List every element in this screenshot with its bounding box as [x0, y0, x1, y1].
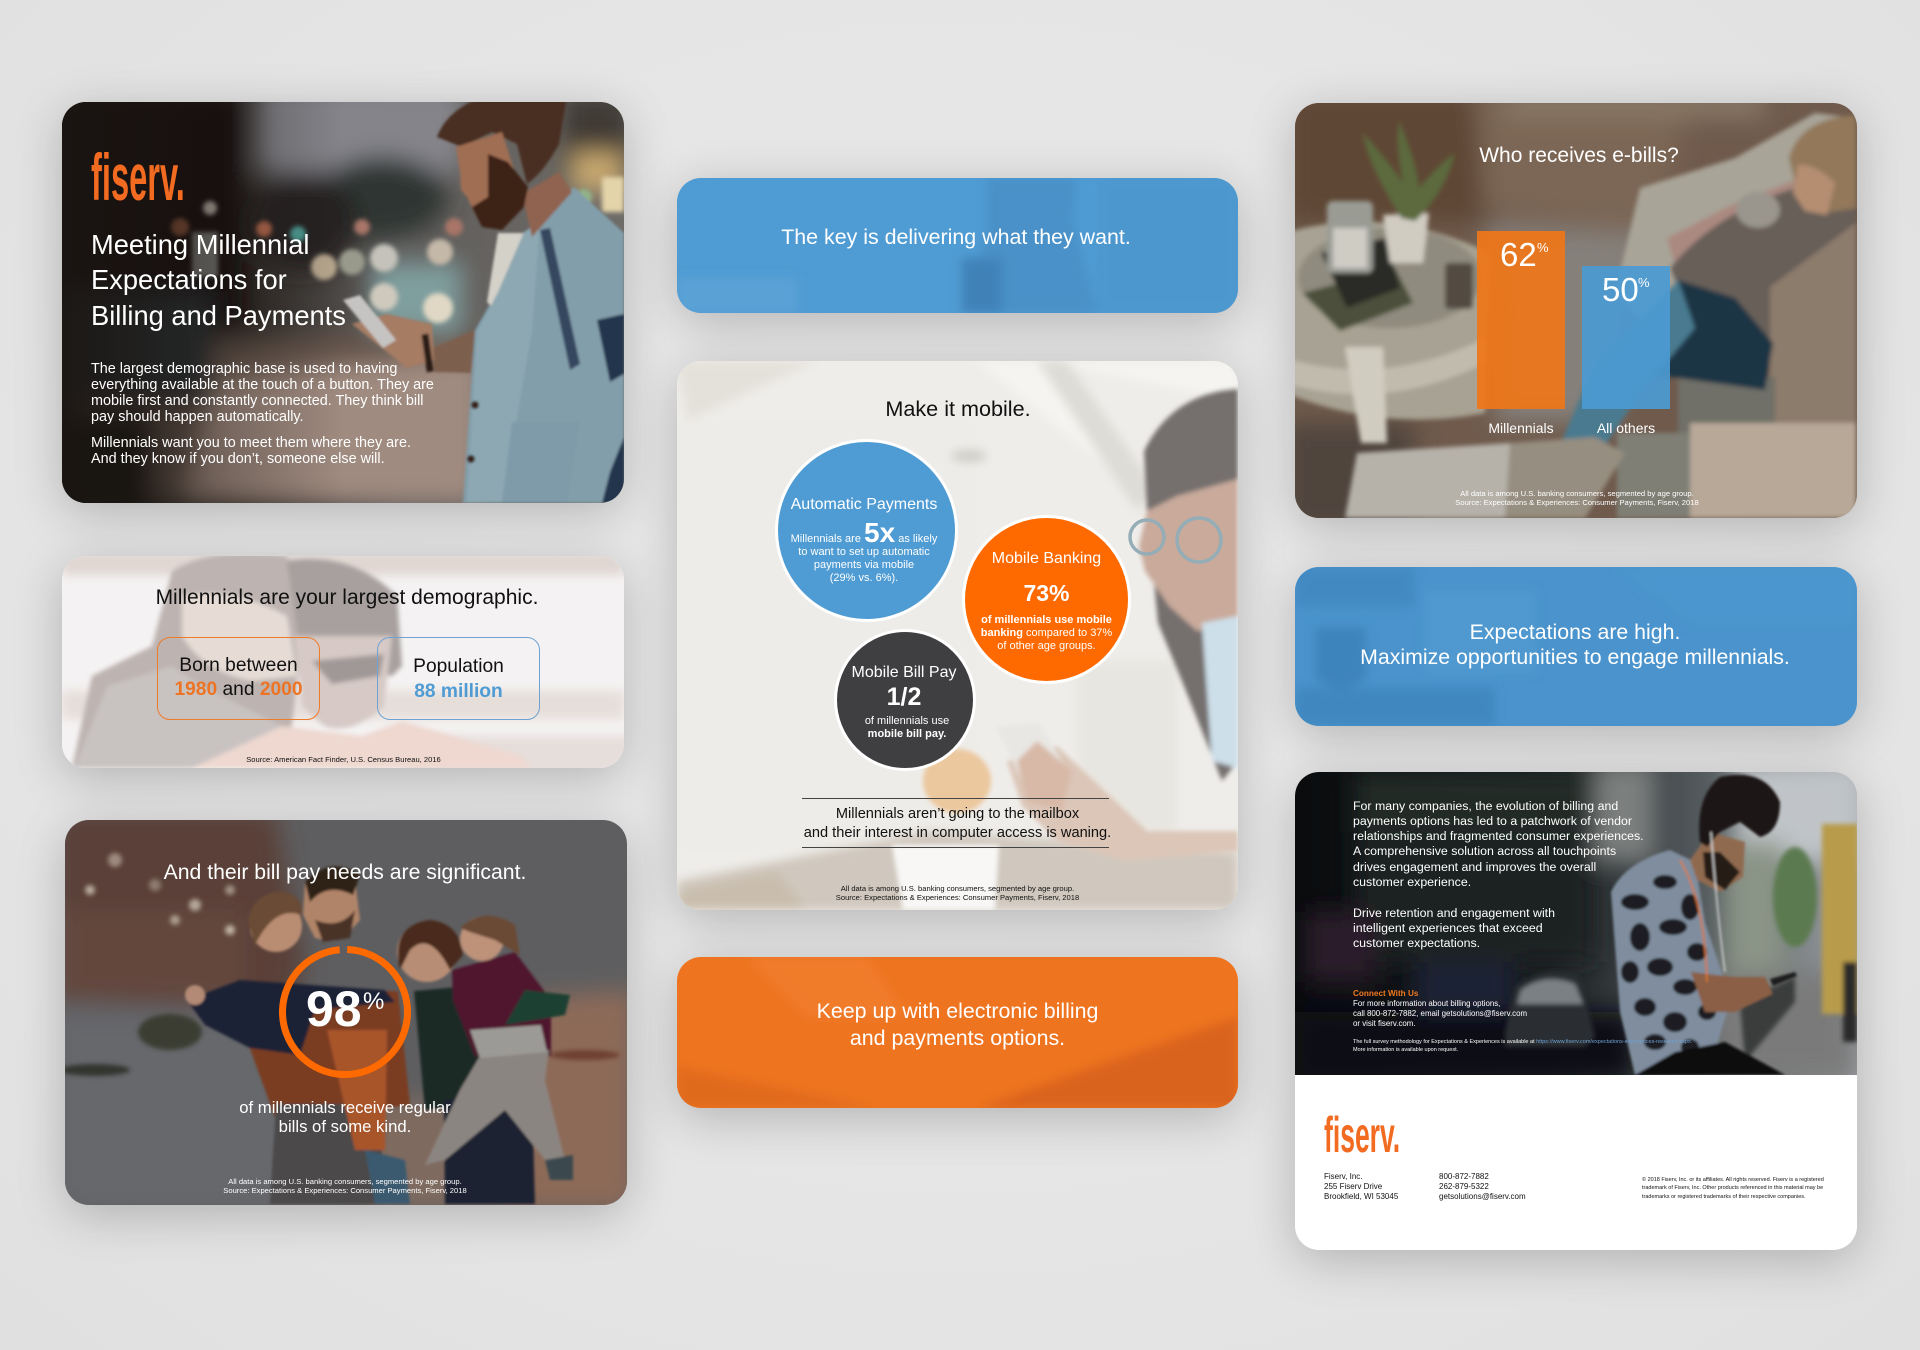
stat box: birth years: Born between: [179, 654, 298, 676]
legal text: trademark of Fiserv, Inc. Other products referenced in this material may be: [1642, 1185, 1823, 1191]
legal text: © 2018 Fiserv, Inc. or its affiliates. All rights reserved. Fiserv is a registered: [1642, 1177, 1824, 1183]
bubble heading: Mobile Banking: [992, 550, 1101, 567]
address: 255 Fiserv Drive: [1324, 1182, 1382, 1191]
message text: Keep up with electronic billing: [817, 999, 1098, 1023]
statement between rules: and their interest in computer access is waning.: [804, 825, 1111, 841]
legal text: [1642, 1177, 1824, 1200]
bar: millennials 62 percent: [1477, 231, 1565, 409]
legal text: trademarks or registered trademarks of their respective companies.: [1642, 1194, 1806, 1200]
bar: millennials 62 percent: %: [1537, 240, 1549, 255]
bubble: automatic payments: [774, 439, 958, 622]
bubble body: to want to set up automatic: [798, 546, 930, 558]
address: [1324, 1172, 1398, 1201]
message text: [817, 999, 1098, 1050]
body paragraph two: Drive retention and engagement with: [1353, 906, 1555, 920]
body paragraph one: A comprehensive solution across all touchpoints: [1353, 844, 1616, 858]
address: Brookfield, WI 53045: [1324, 1192, 1398, 1201]
photo tint: [677, 178, 1238, 313]
bubble body: [791, 517, 938, 584]
intro paragraph: pay should happen automatically.: [91, 409, 304, 425]
body paragraph one: For many companies, the evolution of billing and: [1353, 798, 1618, 812]
bubble heading: Mobile Bill Pay: [852, 664, 956, 681]
phone and email: 800-872-7882: [1439, 1172, 1489, 1181]
intro paragraph: mobile first and constantly connected. They think bill: [91, 393, 424, 409]
photo tint: [1295, 567, 1857, 726]
title: Meeting Millennial: [91, 228, 309, 260]
stat caption: bills of some kind.: [279, 1117, 411, 1136]
donut chart: 98 percent: [279, 946, 411, 1078]
photo tint: [677, 960, 1238, 1108]
panel: bill pay needs: [65, 820, 627, 1205]
source note: Source: Expectations & Experiences: Consumer Payments, Fiserv, 2018: [836, 893, 1079, 902]
logo: fiserv.: [91, 140, 185, 214]
stat: 98 percent: %: [363, 988, 384, 1015]
intro paragraph: The largest demographic base is used to having: [91, 361, 397, 377]
body paragraph one: [1353, 798, 1644, 889]
body paragraph two: customer expectations.: [1353, 936, 1480, 950]
value label: 62: [1500, 236, 1537, 273]
contact text: [1353, 999, 1527, 1028]
stat box: birth years: 1980 and 2000: [174, 679, 303, 700]
message text: and payments options.: [850, 1026, 1065, 1050]
banner: key message blue: [677, 178, 1238, 313]
stat caption: of millennials receive regular: [239, 1098, 451, 1117]
bubble body: (29% vs. 6%).: [830, 572, 898, 584]
bubble body: of millennials use mobile: [981, 614, 1112, 626]
bar: all others 50 percent: [1582, 266, 1670, 409]
phone and email: 262-879-5322: [1439, 1182, 1489, 1191]
source note: Source: American Fact Finder, U.S. Census Bureau, 2016: [246, 754, 441, 764]
methodology note: More information is available upon request.: [1353, 1047, 1458, 1053]
panel: make it mobile: [677, 361, 1238, 910]
message text: The key is delivering what they want.: [781, 224, 1131, 248]
body paragraph two: intelligent experiences that exceed: [1353, 921, 1543, 935]
phone and email: getsolutions@fiserv.com: [1439, 1192, 1526, 1201]
second paragraph: [91, 435, 411, 467]
message text: [1360, 620, 1790, 669]
photo: washed-out woman with phone: [677, 361, 1238, 910]
heading: Who receives e-bills?: [1479, 144, 1679, 167]
heading: And their bill pay needs are significant.: [164, 861, 526, 884]
heading: Make it mobile.: [885, 396, 1031, 421]
panel: closing and contact: [1295, 772, 1857, 1250]
message text: Maximize opportunities to engage millennials.: [1360, 645, 1790, 669]
bubble: mobile banking: [962, 515, 1131, 684]
contact text: For more information about billing options,: [1353, 999, 1500, 1008]
bubble: mobile bill pay: [834, 629, 976, 771]
body paragraph one: relationships and fragmented consumer experiences.: [1353, 829, 1644, 843]
methodology note: [1353, 1039, 1692, 1053]
methodology note: The full survey methodology for Expectations & Experiences is available at https://www.fiserv.com/expectations-experiences-research.aspx.: [1353, 1039, 1692, 1045]
value label: 50: [1602, 271, 1639, 308]
bubble stat: 73%: [1023, 580, 1070, 606]
source note: All data is among U.S. banking consumers, segmented by age group.: [228, 1177, 462, 1186]
bubble body: of other age groups.: [997, 640, 1096, 652]
second paragraph: And they know if you don’t, someone else will.: [91, 451, 385, 467]
contact text: or visit fiserv.com.: [1353, 1019, 1416, 1028]
phone and email: [1439, 1172, 1526, 1201]
heading: Millennials are your largest demographic.: [156, 586, 538, 608]
axis label: all others: All others: [1597, 420, 1655, 436]
source note: [223, 1177, 467, 1195]
bar chart: [1477, 231, 1670, 436]
body paragraph one: customer experience.: [1353, 875, 1471, 889]
statement between rules: [802, 798, 1109, 848]
panel: who receives e-bills: [1295, 103, 1857, 518]
stat caption: [239, 1098, 451, 1136]
bubble heading: Automatic Payments: [791, 496, 937, 513]
photo: man checking phone on a city street: [62, 102, 624, 503]
photo: family on the beach: [65, 820, 627, 1205]
source note: All data is among U.S. banking consumers, segmented by age group.: [1460, 488, 1694, 498]
bubble body: of millennials use: [865, 714, 949, 726]
intro paragraph: [91, 361, 434, 425]
source note: [1455, 488, 1699, 507]
body paragraph one: drives engagement and improves the overall: [1353, 860, 1596, 874]
title: Expectations for: [91, 264, 287, 295]
stat box: population: Population: [413, 656, 504, 677]
bubble body: banking compared to 37%: [981, 627, 1112, 639]
footer logo: fiserv.: [1324, 1106, 1400, 1163]
bubble body: [865, 714, 949, 740]
message text: Expectations are high.: [1470, 620, 1680, 644]
stat box: birth years: [157, 637, 320, 720]
bubble body: mobile bill pay.: [868, 728, 946, 740]
contact text: call 800-872-7882, email getsolutions@fiserv.com: [1353, 1009, 1527, 1018]
photo: woman on sofa: [1295, 103, 1857, 518]
source note: All data is among U.S. banking consumers, segmented by age group.: [841, 884, 1074, 893]
stat box: population: 88 million: [414, 680, 503, 702]
connect heading: Connect With Us: [1353, 989, 1418, 998]
photo: man with earbuds and phone: [1295, 772, 1857, 1075]
stat box: population: [377, 637, 540, 720]
bubble: automatic payments: Millennials are 5x as likely: [791, 517, 937, 548]
source note: Source: Expectations & Experiences: Consumer Payments, Fiserv, 2018: [223, 1186, 467, 1195]
bubble body: [981, 614, 1112, 652]
photo: washed-out couple: [62, 556, 624, 768]
bubble body: payments via mobile: [814, 559, 914, 571]
banner: keep up orange: [677, 957, 1238, 1108]
banner: expectations blue: [1295, 567, 1857, 726]
panel: cover with title and intro: [62, 102, 624, 503]
source note: [836, 884, 1079, 902]
title: Billing and Payments: [91, 300, 346, 330]
source note: Source: Expectations & Experiences: Consumer Payments, Fiserv, 2018: [1455, 498, 1699, 507]
title: [91, 228, 346, 331]
stat: 98 percent: 98: [306, 981, 362, 1037]
axis label: millennials: Millennials: [1488, 420, 1554, 436]
bar: all others 50 percent: %: [1638, 275, 1650, 290]
address: Fiserv, Inc.: [1324, 1172, 1363, 1181]
statement between rules: Millennials aren’t going to the mailbox: [836, 806, 1079, 822]
intro paragraph: everything available at the touch of a button. They are: [91, 377, 434, 393]
bubble stat: 1/2: [887, 683, 921, 711]
body paragraph two: [1353, 906, 1555, 950]
body paragraph one: payments options has led to a patchwork of vendor: [1353, 814, 1632, 828]
second paragraph: Millennials want you to meet them where they are.: [91, 435, 411, 451]
panel: largest demographic: [62, 556, 624, 768]
